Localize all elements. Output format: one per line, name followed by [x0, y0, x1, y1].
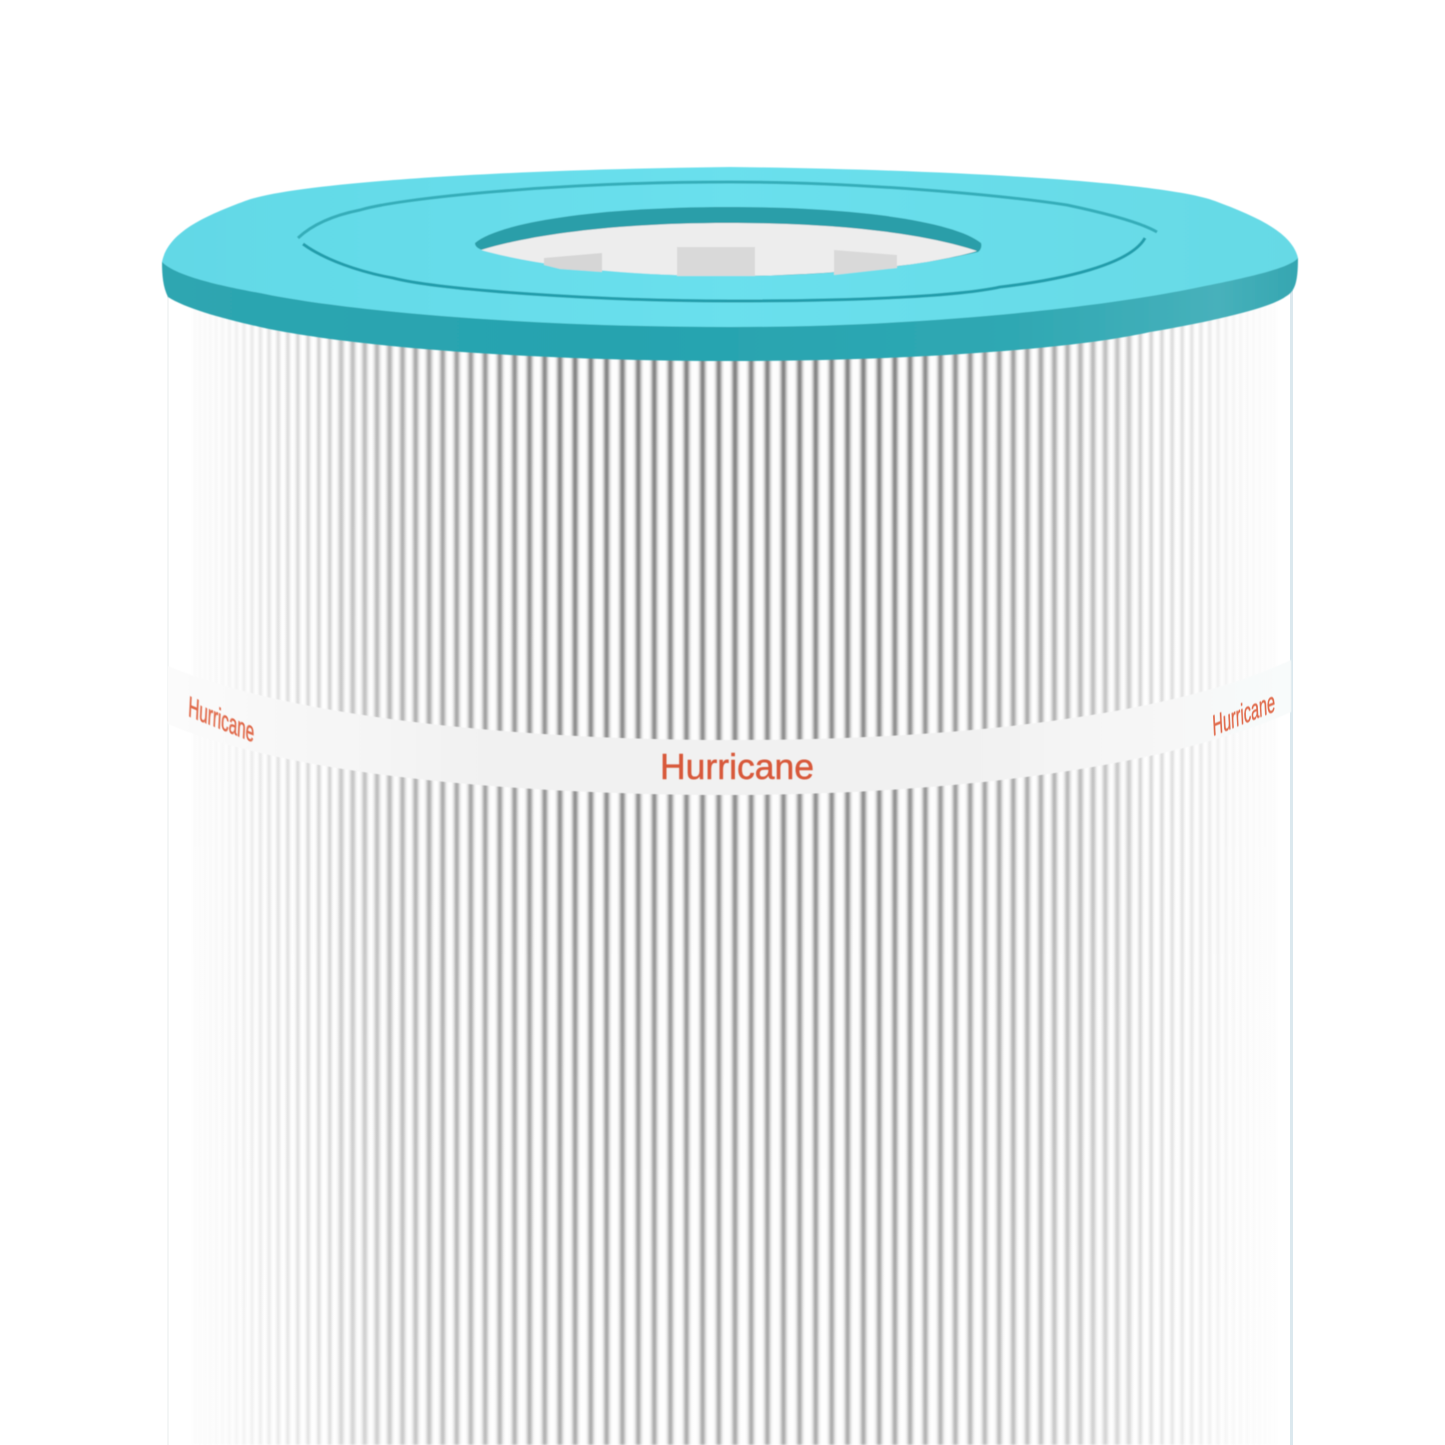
logo: right: Hurricane	[1212, 686, 1276, 743]
raised ring groove	[298, 182, 1157, 238]
inner cage windows	[544, 253, 602, 272]
cartridge body	[167, 285, 1293, 1445]
logo: center: Hurricane	[660, 746, 814, 787]
pleats	[195, 300, 1275, 1445]
teal end cap	[162, 167, 1298, 361]
logo: left: Hurricane	[188, 691, 255, 750]
label band	[168, 660, 1291, 795]
cap top face	[162, 167, 1298, 327]
cap side rim	[162, 258, 1298, 361]
center opening	[475, 207, 981, 276]
